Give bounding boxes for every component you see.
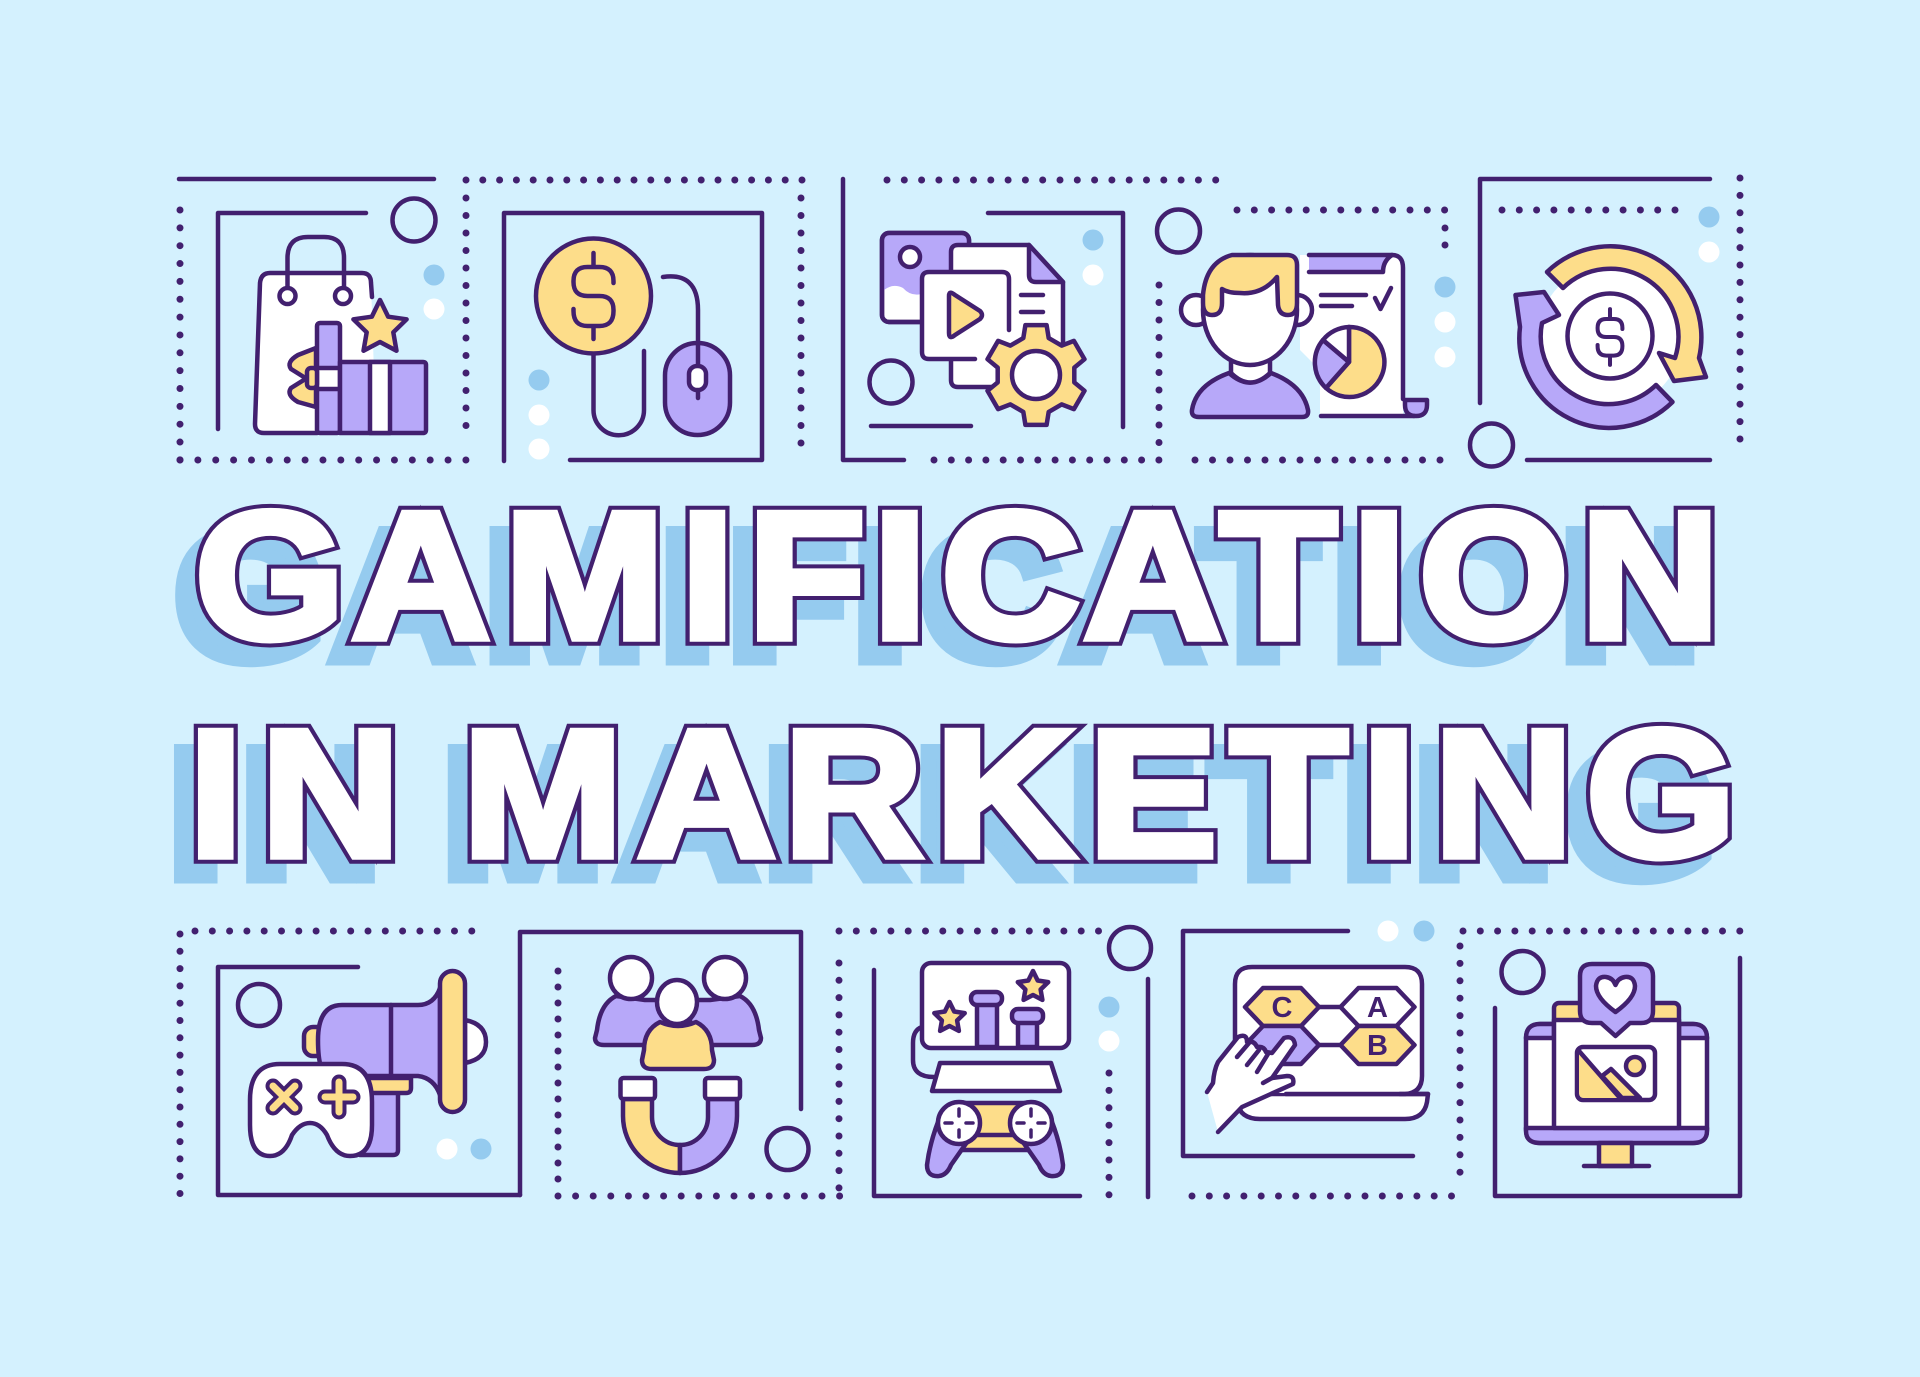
heading line 2: IN MARKETING [189, 692, 1736, 895]
panel: customer analytics [1181, 210, 1456, 460]
heading line 1: GAMIFICATION [195, 474, 1719, 677]
heading shadow [169, 494, 1716, 915]
panel: game statistics [839, 927, 1151, 1197]
icon: shopping bag with gift and star [255, 237, 426, 433]
panel: shopping gift reward [179, 179, 466, 460]
panel: pay per click [466, 180, 802, 461]
label: C: C [1272, 992, 1293, 1024]
icon: people and magnet [595, 957, 761, 1173]
panel: content assets [843, 179, 1217, 460]
icon: person with report [1181, 255, 1427, 417]
heading shadow: GAMIFICATION [175, 494, 1699, 697]
icon: circular dollar arrows [1516, 246, 1706, 428]
panel: choice quiz [1183, 920, 1741, 1196]
panel: game marketing megaphone [180, 931, 520, 1195]
icon: leaderboard screen, keyboard, controller [913, 963, 1069, 1176]
icon: laptop with hexagons and pointing hand [1207, 967, 1428, 1132]
heading line 2: IN MARKETING [189, 692, 1736, 895]
heading line 1: GAMIFICATION [195, 474, 1719, 677]
icon: megaphone and game controller [250, 971, 486, 1156]
icon: monitor with heart bubble and image [1526, 964, 1707, 1166]
icon: dollar coin and computer mouse [536, 238, 730, 435]
panel: customer attraction [520, 932, 840, 1196]
title: Gamification in Marketing [169, 474, 1736, 915]
icon: media files and gear [882, 233, 1084, 425]
panel: revenue cycle [1470, 178, 1740, 466]
label: A: A [1367, 992, 1388, 1024]
heading shadow: IN MARKETING [169, 712, 1716, 915]
label: B: B [1367, 1030, 1388, 1062]
panel: social media content [1495, 951, 1740, 1196]
